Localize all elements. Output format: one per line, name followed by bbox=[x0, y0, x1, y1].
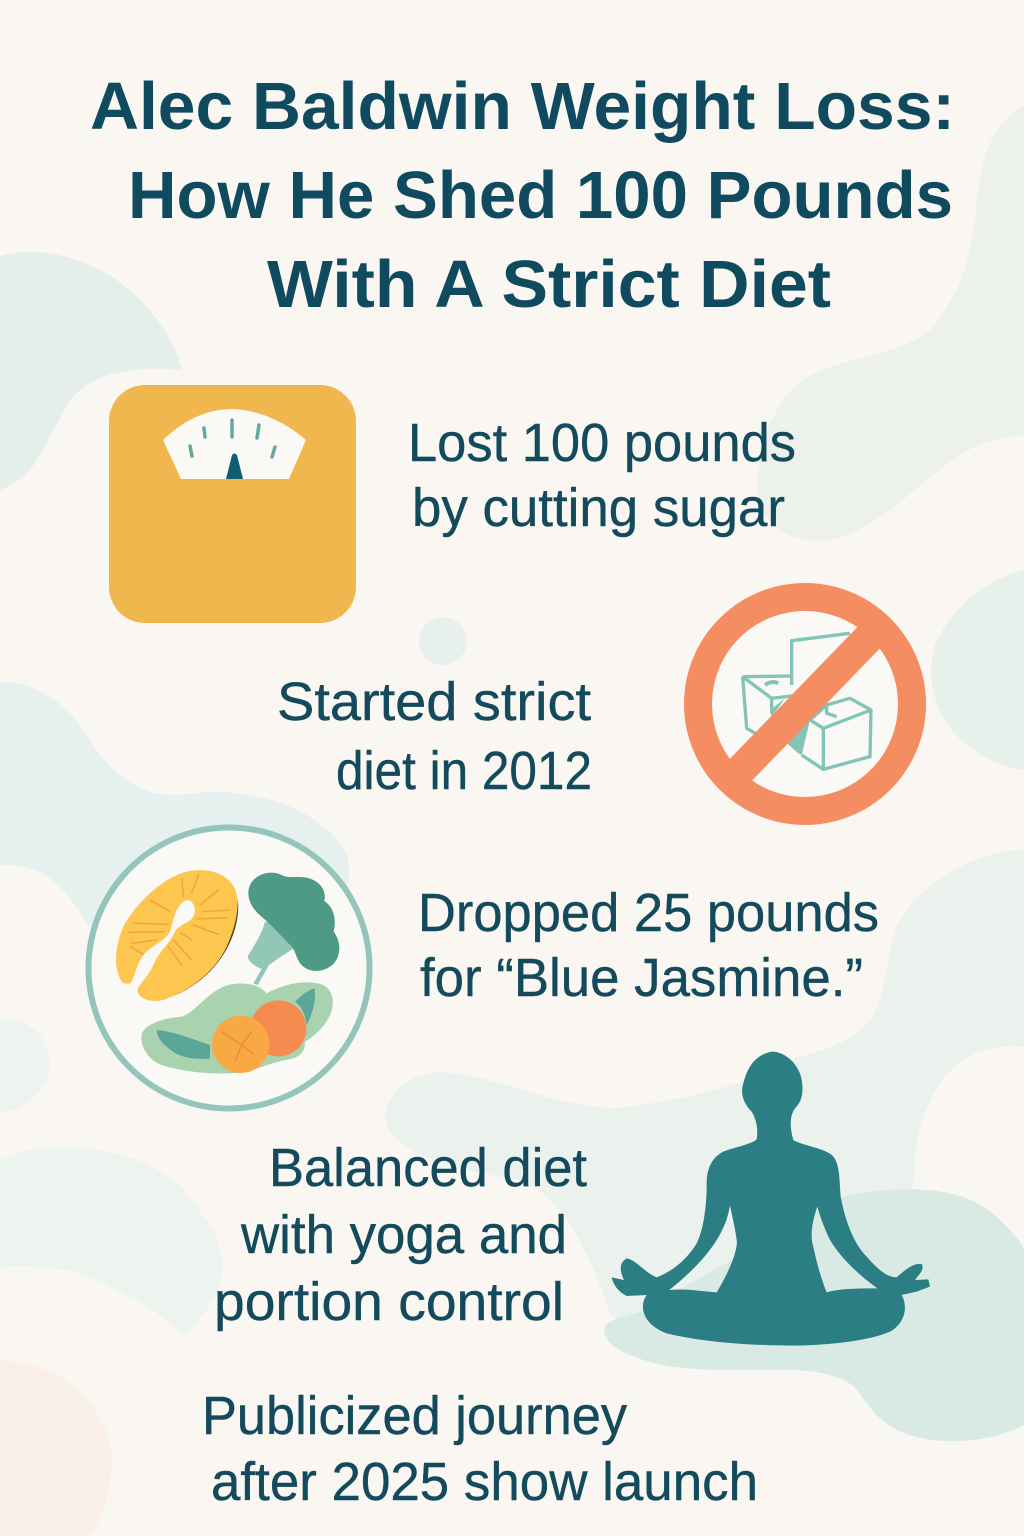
text: publicized journey: Publicized journey bbox=[202, 1386, 627, 1446]
citrus slice bbox=[212, 1016, 269, 1073]
orange slice bbox=[250, 1000, 306, 1056]
title bbox=[90, 69, 955, 322]
icon: meditating figure bbox=[612, 1052, 930, 1346]
text: dropped 25 pounds: Dropped 25 pounds bbox=[418, 883, 879, 943]
text: lost 100 pounds: Lost 100 pounds bbox=[408, 413, 796, 473]
text: publicized journey bbox=[202, 1386, 758, 1512]
icon: healthy plate bbox=[88, 828, 370, 1108]
text: balanced diet: with yoga and bbox=[240, 1205, 567, 1265]
title: With A Strict Diet bbox=[267, 247, 831, 322]
text: started strict diet bbox=[277, 672, 592, 801]
text: started strict diet: diet in 2012 bbox=[336, 741, 592, 801]
text: balanced diet bbox=[214, 1138, 587, 1332]
text: started strict diet: Started strict bbox=[277, 672, 591, 732]
salmon steak bbox=[116, 870, 238, 1001]
text: lost 100 pounds bbox=[408, 413, 796, 538]
text: dropped 25 pounds bbox=[418, 883, 879, 1008]
icon: bathroom scale bbox=[109, 385, 356, 623]
text: publicized journey: after 2025 show launch bbox=[211, 1452, 758, 1512]
text: balanced diet: portion control bbox=[214, 1272, 564, 1332]
text: lost 100 pounds: by cutting sugar bbox=[412, 478, 785, 538]
title: How He Shed 100 Pounds bbox=[128, 158, 953, 233]
text: dropped 25 pounds: for “Blue Jasmine.” bbox=[420, 948, 863, 1008]
salad leaves bbox=[141, 982, 333, 1074]
icon: no sugar bbox=[697, 596, 913, 813]
title: Alec Baldwin Weight Loss: bbox=[90, 69, 955, 144]
broccoli bbox=[248, 873, 339, 985]
text: balanced diet: Balanced diet bbox=[269, 1138, 587, 1198]
